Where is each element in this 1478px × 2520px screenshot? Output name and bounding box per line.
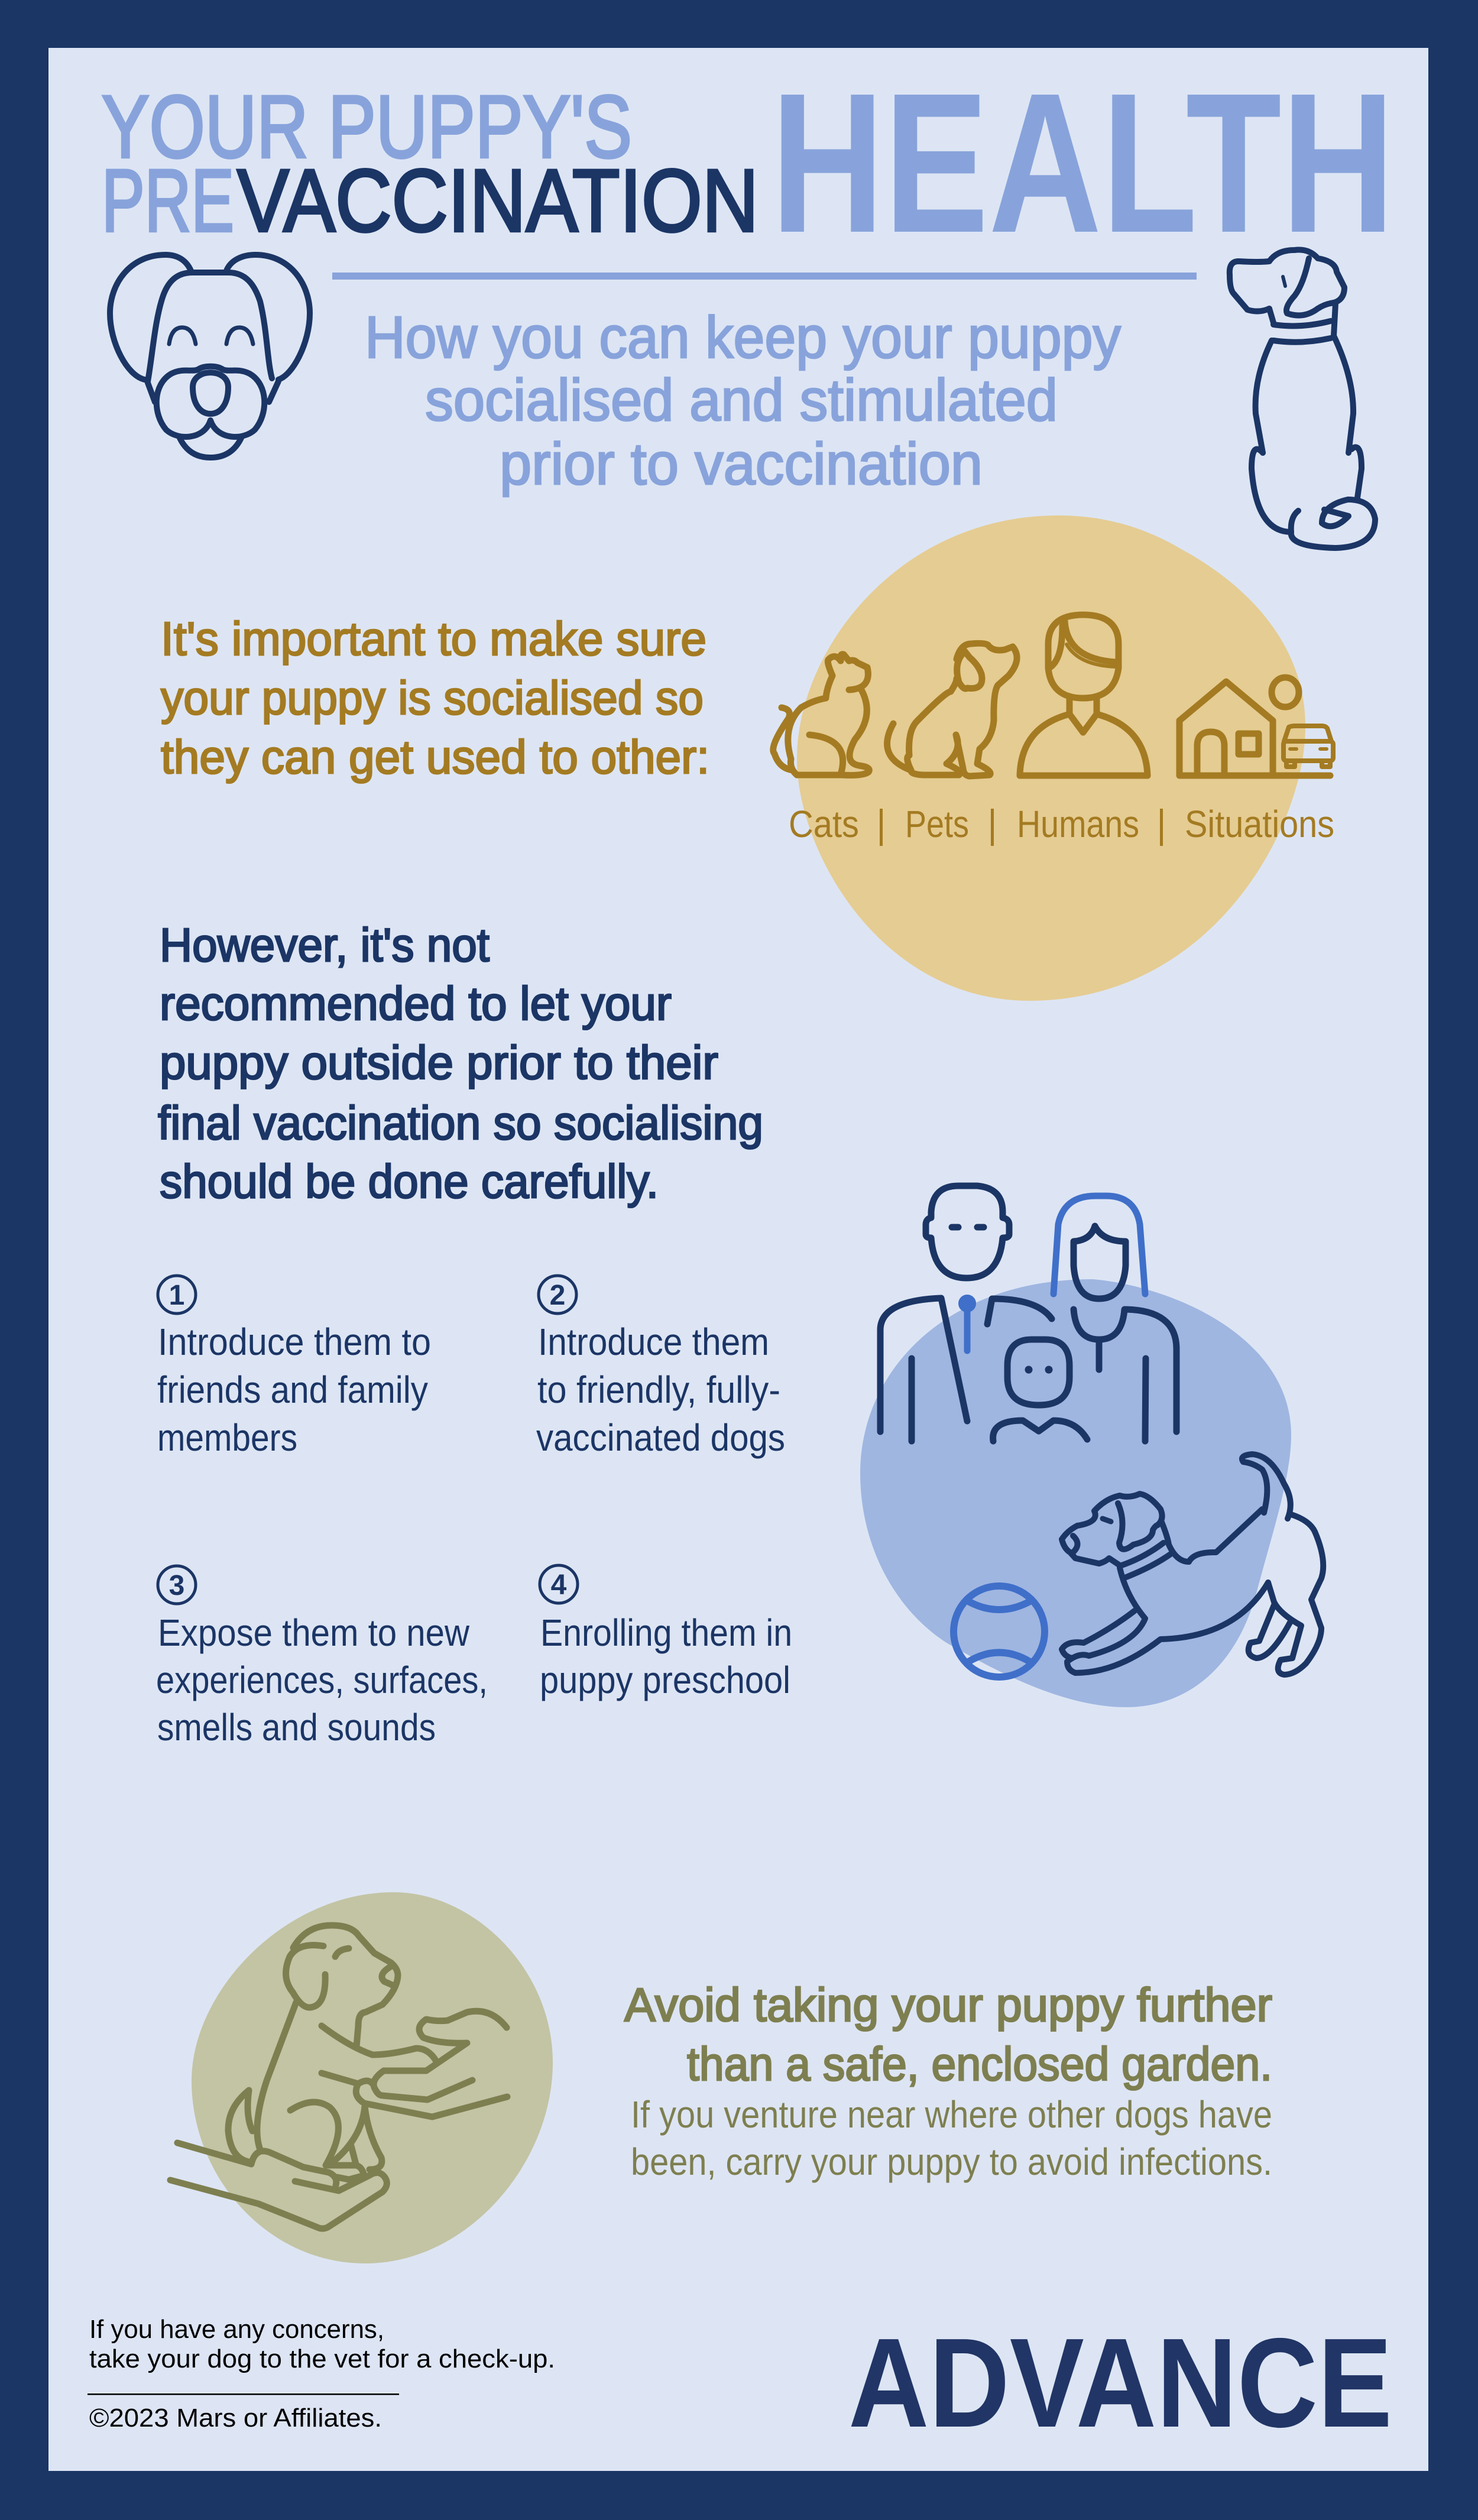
subtitle [365,304,1121,497]
icon: child [993,1340,1087,1441]
step 1: 1 [169,1280,184,1311]
step 4 [540,1565,792,1701]
icon: dog [887,643,1017,776]
title divider line [332,273,1197,280]
icon: puppy held in hands [170,1925,507,2229]
text: safe garden advice: been, carry your puppy to avoid infections. [631,2140,1272,2183]
icon: puppy face [110,255,310,458]
step 1: members [157,1416,297,1459]
icon: woman [1054,1196,1176,1441]
text: socialise intro: It's important to make sure [161,612,706,665]
text: however warning: should be done carefully. [160,1155,659,1208]
step 3: experiences, surfaces, [156,1659,488,1701]
icon labels [789,803,1334,846]
text: safe garden advice: Avoid taking your puppy further [624,1979,1272,2031]
icon: ball [954,1586,1045,1677]
text: however warning [158,919,763,1208]
step 2: vaccinated dogs [536,1416,785,1459]
title: PRE [102,151,234,250]
footer note: If you have any concerns, [89,2315,384,2344]
icon: sitting dog [1230,250,1375,548]
panel: socialise blob [797,515,1305,1001]
icon: cat [773,654,869,775]
footer note [87,2315,555,2433]
title: YOUR PUPPY'S [102,77,632,176]
step 4: Enrolling them in [540,1611,792,1654]
step 4: 4 [551,1569,567,1601]
footer note: ©2023 Mars or Affiliates. [89,2404,382,2433]
icon: playful dog [1062,1454,1323,1675]
step 3 [156,1566,488,1749]
subtitle: socialised and stimulated [425,367,1058,433]
icon labels: Humans [1017,803,1139,845]
step 1: Introduce them to [158,1321,431,1363]
text: however warning: final vaccination so socialising [158,1097,763,1149]
step 2: to friendly, fully- [537,1368,780,1411]
subtitle: How you can keep your puppy [365,304,1121,371]
text: safe garden advice: than a safe, enclosed garden. [687,2038,1272,2090]
text: socialise intro [161,612,709,783]
footer note: take your dog to the vet for a check-up. [89,2344,555,2373]
icon: human [1020,615,1148,776]
step 1: friends and family [157,1368,428,1411]
subtitle: prior to vaccination [500,431,983,497]
step 2 [536,1276,785,1459]
step 3: smells and sounds [157,1706,436,1749]
step 1 [157,1276,431,1459]
icon labels: Pets [905,803,969,845]
icon: man [880,1186,1052,1441]
step 3: 3 [169,1570,184,1601]
icon labels: Cats [789,803,859,845]
text: socialise intro: your puppy is socialised so [161,672,704,724]
logo: ADVANCE: ADVANCE [848,2311,1392,2454]
step 2: Introduce them [538,1321,769,1363]
title: VACCINATION [237,151,759,250]
text: socialise intro: they can get used to other: [161,731,709,783]
icon: house and car [1179,677,1333,776]
text: safe garden advice [624,1979,1272,2183]
panel: garden blob [192,1892,553,2263]
title [102,52,1395,274]
text: however warning: recommended to let your [160,977,672,1030]
text: however warning: However, it's not [160,919,490,971]
step 3: Expose them to new [158,1611,470,1654]
text: safe garden advice: If you venture near where other dogs have [631,2093,1272,2136]
icon labels: Situations [1185,803,1334,845]
step 4: puppy preschool [540,1659,790,1701]
text: however warning: puppy outside prior to their [160,1036,718,1089]
panel: family blob [860,1279,1291,1707]
step 2: 2 [550,1280,565,1311]
